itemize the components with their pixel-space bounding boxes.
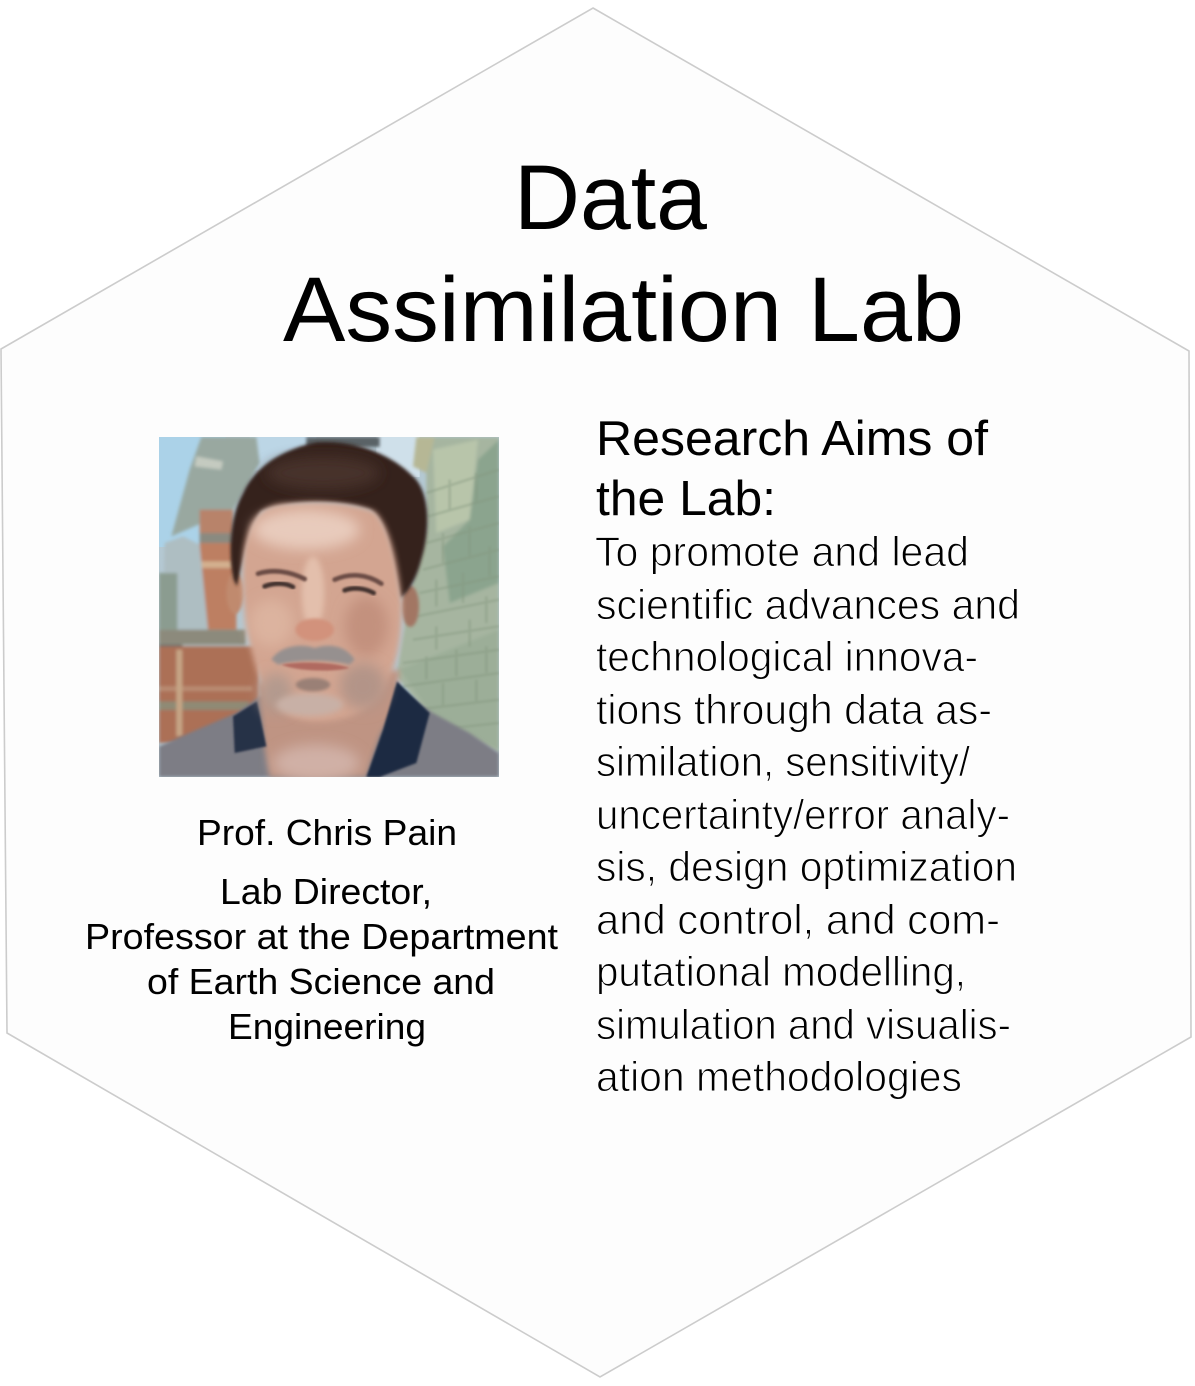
text block: research aims body: similation, sensitivity/ (596, 738, 970, 785)
green brick wall (396, 437, 499, 753)
heading: research aims: the Lab: (596, 472, 776, 526)
text block: research aims body: uncertainty/error analy- (596, 791, 1010, 838)
tower and brick (159, 437, 380, 743)
caption: director role: Professor at the Department (85, 916, 558, 957)
text block: research aims body: To promote and lead (595, 528, 969, 575)
text block: research aims body: ation methodologies (596, 1053, 962, 1100)
caption: director role (85, 871, 558, 1047)
heading: research aims: Research Aims of (596, 412, 988, 466)
brows and eyes (258, 571, 381, 593)
caption: director role: Lab Director, (220, 871, 432, 912)
moustache and mouth (271, 646, 355, 665)
caption: director role: Engineering (228, 1006, 426, 1047)
text block: research aims body: scientific advances and (596, 581, 1020, 628)
text block: research aims body: sis, design optimization (596, 843, 1017, 890)
title (283, 147, 964, 361)
text block: research aims body: tions through data as- (596, 686, 992, 733)
title: Data (514, 147, 708, 249)
collars (233, 681, 430, 777)
portrait photo: Prof. Chris Pain (159, 437, 499, 777)
text block: research aims body: and control, and com- (596, 896, 1000, 943)
caption: director name: Prof. Chris Pain (197, 812, 457, 853)
text block: research aims body: technological innova- (596, 633, 978, 680)
text block: research aims body: simulation and visualis- (596, 1001, 1011, 1048)
hair (231, 442, 427, 598)
heading: research aims (596, 412, 988, 526)
ears (226, 572, 244, 614)
text block: research aims body (595, 528, 1020, 1100)
shirt (159, 697, 499, 777)
caption: director role: of Earth Science and (147, 961, 495, 1002)
neck (258, 670, 400, 777)
face (242, 502, 402, 722)
title: Assimilation Lab (283, 259, 964, 361)
text block: research aims body: putational modelling, (596, 948, 966, 995)
